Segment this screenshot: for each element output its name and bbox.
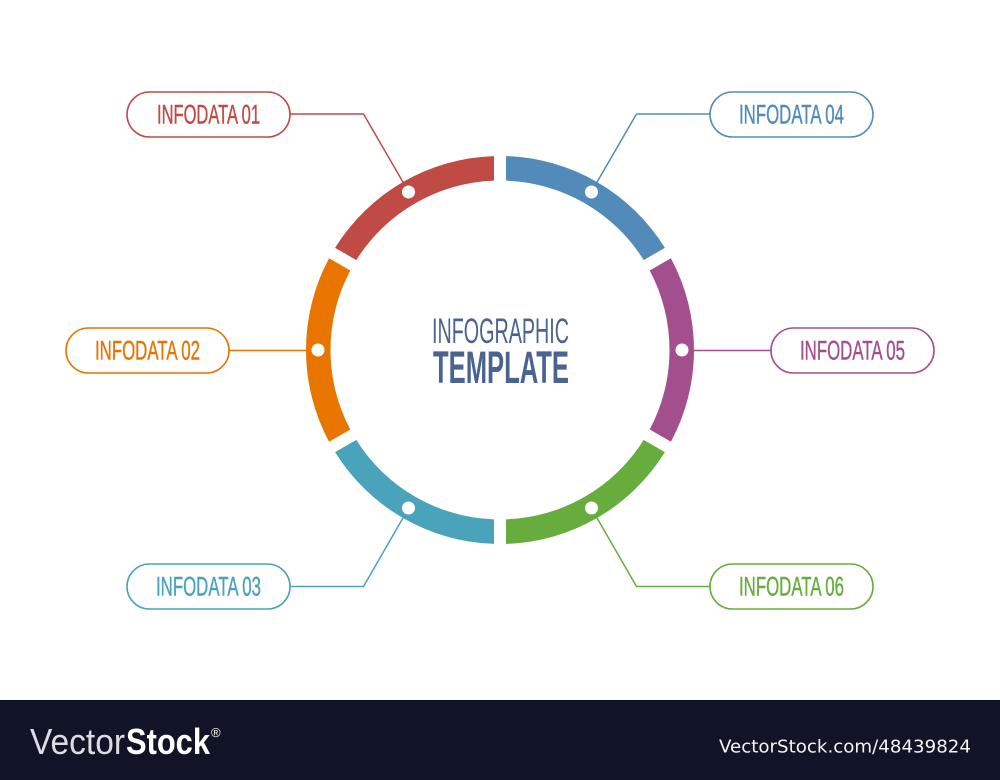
label 02 with connector: INFODATA 02 [95, 336, 200, 366]
label 01 with connector [127, 92, 404, 183]
label 01 with connector: INFODATA 01 [157, 100, 260, 130]
ring segment 3: teal [335, 440, 494, 544]
ring segment 1: red [335, 156, 494, 260]
ring segment 4: blue [506, 156, 665, 260]
label 03 with connector [127, 517, 404, 609]
footer logo: Stock [126, 721, 211, 762]
title line: infographic: INFOGRAPHIC [432, 311, 569, 351]
label 06 with connector: INFODATA 06 [739, 572, 844, 602]
label 04 with connector [596, 92, 873, 183]
footer image id: VectorStock.com/48439824 [719, 736, 971, 758]
label 05 with connector: INFODATA 05 [800, 336, 905, 366]
footer logo: Vector [30, 721, 125, 762]
label 02 with connector [66, 328, 306, 373]
label 04 with connector: INFODATA 04 [739, 100, 844, 130]
ring segment 6: green [506, 440, 665, 544]
ring segment 5: purple [650, 258, 694, 442]
label 06 with connector [596, 517, 873, 609]
title line: template: TEMPLATE [433, 342, 569, 393]
center title [432, 311, 569, 393]
footer logo: ® [211, 725, 221, 740]
footer logo [30, 721, 221, 762]
footer bar [0, 700, 1000, 780]
label 03 with connector: INFODATA 03 [156, 572, 261, 602]
ring segment 2: orange [306, 258, 350, 442]
label 05 with connector [694, 328, 934, 373]
